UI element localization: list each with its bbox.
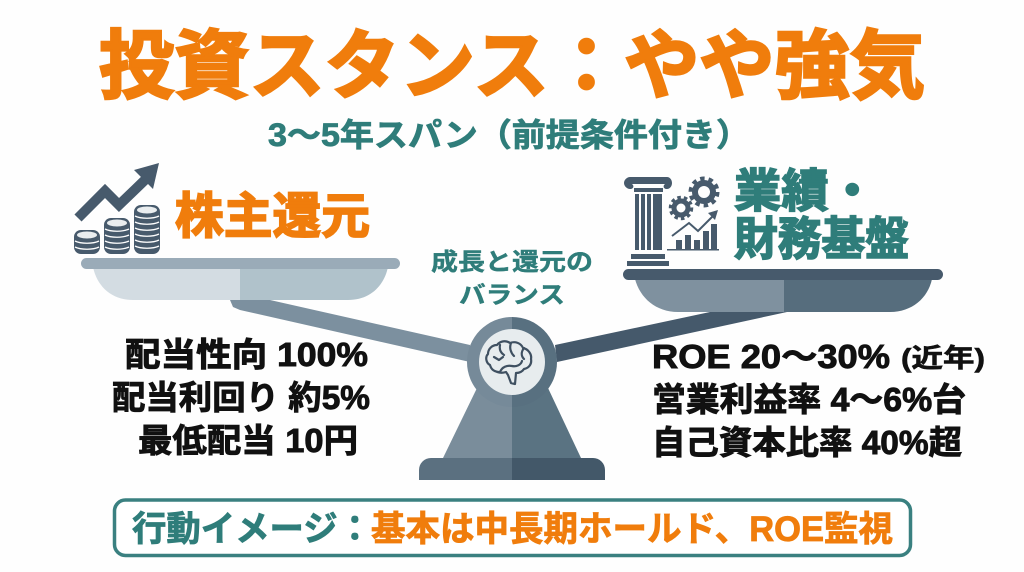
stand base [419, 458, 512, 480]
scale beam: left arm [230, 300, 470, 362]
heading: 業績・財務基盤 [734, 165, 909, 265]
right pan bowl [635, 279, 784, 312]
text block: performance metrics: (近年) [901, 343, 985, 373]
pillar [624, 177, 672, 266]
callout: action image: 行動イメージ： [132, 510, 372, 549]
text block: performance metrics: 自己資本比率 40%超 [652, 424, 962, 461]
left pan rim [81, 258, 400, 269]
title: 投資スタンス：やや強気 [99, 24, 925, 108]
text block: shareholder return metrics: 配当性向 100% [125, 336, 368, 373]
rising arrow [78, 178, 147, 218]
left pan bowl [93, 267, 240, 300]
scale stand [419, 317, 605, 480]
text block: shareholder return metrics: 配当利回り 約5% [112, 379, 370, 416]
panel: right pan (業績・財務基盤) [623, 269, 943, 312]
center label: 成長と還元のバランス [431, 249, 593, 309]
subtitle: 3〜5年スパン（前提条件付き） [268, 117, 750, 153]
small growth chart [667, 210, 719, 250]
text block: performance metrics [652, 338, 985, 461]
callout: action image [114, 500, 910, 556]
heading: 業績・財務基盤: 業績・ [734, 165, 876, 217]
center label: 成長と還元のバランス: バランス [459, 282, 565, 309]
text block: performance metrics: ROE 20〜30% [652, 338, 890, 375]
icon: pillar, gears and chart [624, 177, 719, 266]
coin stacks [74, 205, 160, 254]
heading: 株主還元: 株主還元 [175, 190, 370, 244]
icon: coins and rising arrow [74, 163, 160, 254]
text block: shareholder return metrics: 最低配当 10円 [138, 422, 358, 459]
heading: 業績・財務基盤: 財務基盤 [734, 213, 909, 265]
scale beam: right arm [555, 312, 787, 362]
panel: left pan (株主還元) [81, 258, 400, 300]
gears [670, 178, 718, 218]
text block: performance metrics: 営業利益率 4〜6%台 [652, 381, 966, 418]
callout: action image: 基本は中長期ホールド、ROE監視 [371, 510, 893, 549]
center label: 成長と還元のバランス: 成長と還元の [431, 249, 593, 276]
right pan rim [623, 269, 943, 280]
icon: brain [479, 329, 545, 395]
stand trunk [443, 388, 512, 458]
stand pivot circle [467, 317, 512, 407]
text block: shareholder return metrics [112, 336, 370, 459]
